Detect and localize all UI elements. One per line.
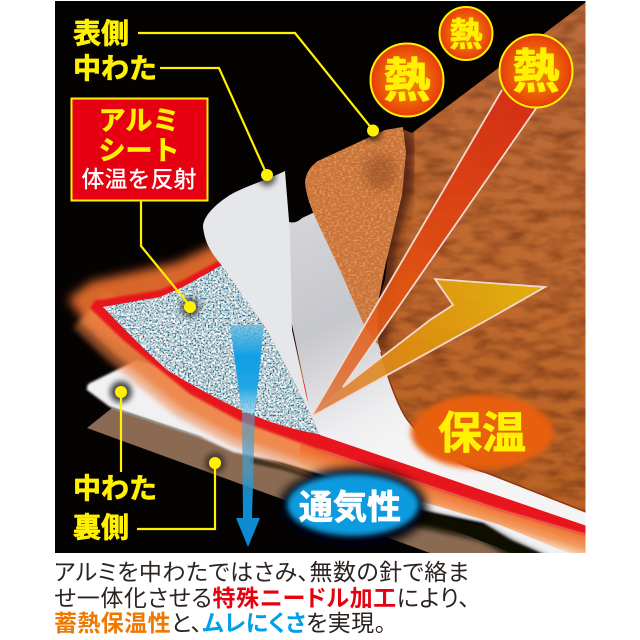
heat glow along sheet edge xyxy=(82,250,600,566)
panel: fabric layer diagram xyxy=(55,0,600,566)
badge: heat left: 熱 xyxy=(384,54,430,107)
bubble: 通気性: 通気性 xyxy=(299,489,401,527)
under batting sheet xyxy=(289,212,590,527)
caption text: せ一体化させる特殊ニードル加工により、 xyxy=(54,585,470,611)
label: 中わた top: 中わた xyxy=(73,53,157,84)
badge: heat small: 熱 xyxy=(450,16,482,53)
ventilation arrow xyxy=(230,325,264,547)
bubble: 保温 xyxy=(411,395,553,469)
caption text: 蓄熱保温性と、ムレにくさを実現。 xyxy=(54,610,386,636)
knit flap of the face fabric xyxy=(305,127,406,345)
leader: 中わた bottom xyxy=(110,381,132,472)
leader: 裏側 xyxy=(137,453,225,529)
lower batting layer xyxy=(87,360,590,556)
callout: aluminium sheet: アルミ xyxy=(99,106,179,136)
leader: aluminium sheet xyxy=(141,200,200,317)
caption text: アルミを中わたではさみ、無数の針で絡ま xyxy=(54,559,469,585)
back fabric layer xyxy=(87,408,520,556)
heat reflection arrow xyxy=(311,90,545,417)
label: 裏側: 裏側 xyxy=(73,512,129,543)
leader: 表側 xyxy=(138,33,382,141)
label: 中わた bottom: 中わた xyxy=(73,473,157,504)
caption text xyxy=(54,559,470,636)
label: 表側: 表側 xyxy=(73,18,129,49)
folded batting flap xyxy=(203,171,313,418)
bubble: 保温: 保温 xyxy=(438,409,526,458)
badge: heat small xyxy=(440,7,492,60)
bubble: 通気性 xyxy=(279,468,427,548)
leader: 中わた top xyxy=(160,68,276,186)
badge: heat right: 熱 xyxy=(512,45,560,98)
aluminium sheet xyxy=(103,265,320,434)
fleece outer fabric xyxy=(370,0,590,515)
badge: heat left xyxy=(370,44,444,116)
callout: aluminium sheet xyxy=(72,98,208,200)
callout: aluminium sheet: シート xyxy=(98,136,180,166)
callout: aluminium sheet: 体温を反射 xyxy=(82,166,196,192)
shadow under batting xyxy=(250,460,548,566)
badge: heat right xyxy=(500,34,572,108)
